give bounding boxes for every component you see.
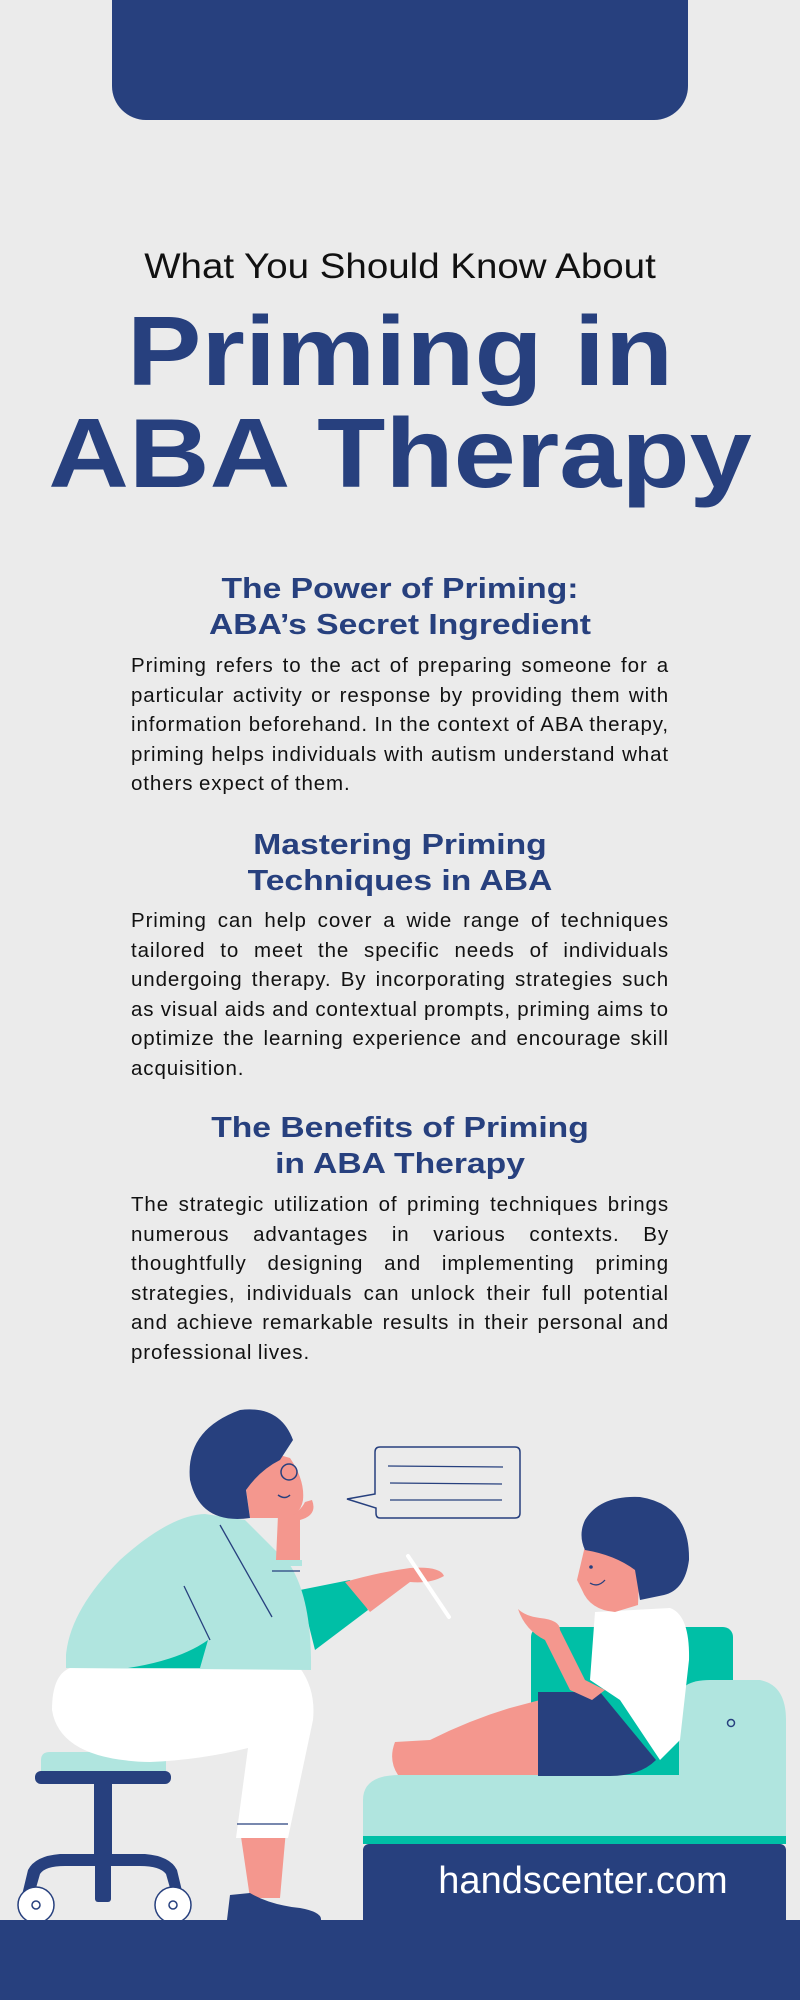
title: Priming in bbox=[127, 296, 673, 406]
subtitle: What You Should Know About bbox=[144, 247, 656, 286]
couch bbox=[363, 1627, 786, 1844]
section 3 heading: The Benefits of Priming bbox=[211, 1112, 589, 1144]
section 3 heading bbox=[211, 1112, 589, 1180]
section 1 text: Priming refers to the act of preparing someone for a particular activity or response by providing them with information beforehand. In the context of ABA therapy, priming helps individuals with autism understand what others expect of them. bbox=[131, 654, 669, 795]
therapist bbox=[52, 1409, 449, 1920]
title: ABA Therapy bbox=[48, 398, 752, 508]
section 2 heading: Techniques in ABA bbox=[248, 865, 552, 897]
title bbox=[48, 296, 752, 508]
stool bbox=[18, 1752, 191, 1923]
top banner tab bbox=[112, 0, 688, 120]
section 3 text: The strategic utilization of priming techniques brings numerous advantages in various contexts. By thoughtfully designing and implementing priming strategies, individuals can unlock their full potential and achieve remarkable results in their personal and professional lives. bbox=[131, 1193, 669, 1364]
child bbox=[392, 1497, 689, 1776]
section 2 heading bbox=[248, 829, 552, 897]
section 1 heading: ABA’s Secret Ingredient bbox=[209, 609, 591, 641]
speech bubble bbox=[347, 1447, 520, 1518]
section 3 heading: in ABA Therapy bbox=[275, 1148, 525, 1180]
bottom bar bbox=[0, 1920, 800, 2000]
section 2 heading: Mastering Priming bbox=[253, 829, 547, 861]
section 1 heading bbox=[209, 573, 591, 641]
section 1 heading: The Power of Priming: bbox=[222, 573, 578, 605]
section 2 text: Priming can help cover a wide range of techniques tailored to meet the specific needs of individuals undergoing therapy. By incorporating strategies such as visual aids and contextual prompts, priming aims to optimize the learning experience and encourage skill acquisition. bbox=[131, 909, 669, 1080]
website url: handscenter.com bbox=[438, 1860, 728, 1902]
website box bbox=[363, 1844, 786, 1934]
